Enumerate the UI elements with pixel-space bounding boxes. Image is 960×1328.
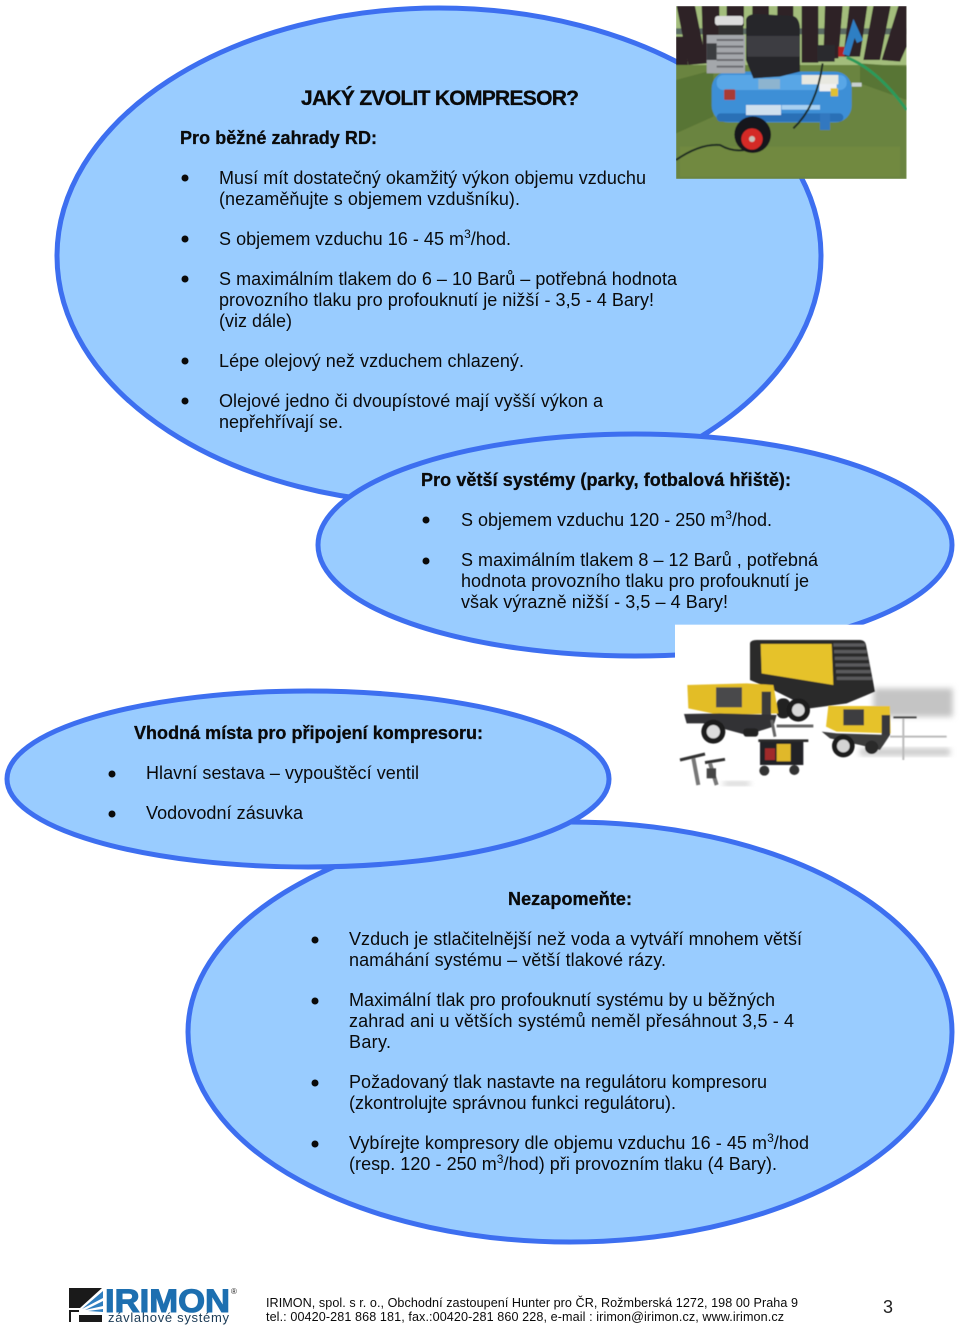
bullet list: larger systems [422, 508, 819, 612]
bubble: connection points [7, 691, 609, 867]
logo: IRIMON: závlahové systémy [108, 1310, 230, 1325]
bullet list: garden systems [182, 168, 678, 432]
bullet list: garden systems: (viz dále) [219, 311, 292, 331]
bubble: larger systems [318, 434, 952, 656]
bullet list: reminders: (zkontrolujte správnou funkci regulátoru). [349, 1093, 676, 1113]
bullet list: reminders: Vybírejte kompresory dle objemu vzduchu 16 - 45 m [349, 1133, 767, 1153]
bullet list: reminders: Vzduch je stlačitelnější než voda a vytváří mnohem větší [349, 929, 802, 949]
bubble: reminders [188, 822, 952, 1242]
bullet list: connection points: Vodovodní zásuvka [146, 803, 304, 823]
bullet list: larger systems: však výrazně nižší - 3,5 – 4 Bary! [461, 592, 728, 612]
bullet list: larger systems: S objemem vzduchu 120 - 250 m [461, 510, 725, 530]
panel: reminders [188, 822, 952, 1242]
bullet list: larger systems: 3 [725, 508, 732, 522]
bullet list: connection points: Hlavní sestava – vypouštěcí ventil [146, 763, 419, 783]
logo: IRIMON: ® [231, 1287, 237, 1296]
logo: IRIMON: IRIMON [105, 1283, 230, 1319]
panel: garden systems [57, 8, 821, 504]
heading: connection points: Vhodná místa pro připojení kompresoru: [134, 723, 483, 743]
bullet list: garden systems: S objemem vzduchu 16 - 45 m [219, 229, 464, 249]
bullet list: larger systems: /hod. [732, 510, 772, 530]
page number: 3 [883, 1297, 893, 1317]
footer: contact details: IRIMON, spol. s r. o., Obchodní zastoupení Hunter pro ČR, Rožmberská 1272, 198 00 Praha 9 [266, 1295, 798, 1310]
bullet list: larger systems: S maximálním tlakem 8 – 12 Barů , potřebná [461, 550, 819, 570]
bullet list: garden systems: (nezaměňujte s objemem vzdušníku). [219, 189, 520, 209]
bullet list: connection points [108, 763, 419, 823]
bullet list: reminders: zahrad ani u větších systémů neměl přesáhnout 3,5 - 4 [349, 1011, 794, 1031]
footer: contact details [266, 1295, 798, 1324]
logo: IRIMON [69, 1283, 237, 1325]
bullet list: garden systems: Olejové jedno či dvoupístové mají vyšší výkon a [219, 391, 604, 411]
bubble: garden systems [57, 8, 821, 504]
bullet list: reminders: namáhání systému – větší tlakové rázy. [349, 950, 666, 970]
panel: connection points [7, 691, 609, 867]
bullet list: garden systems: 3 [464, 227, 471, 241]
bullet list: reminders: /hod) při provozním tlaku (4 Bary). [504, 1154, 777, 1174]
bullet list: garden systems: S maximálním tlakem do 6 – 10 Barů – potřebná hodnota [219, 269, 678, 289]
heading: reminders: Nezapomeňte: [508, 889, 632, 909]
bullet list: reminders: Požadovaný tlak nastavte na regulátoru kompresoru [349, 1072, 767, 1092]
footer: contact details: tel.: 00420-281 868 181, fax.:00420-281 860 228, e-mail : irimon@irimon.cz, www.irimon.cz [266, 1310, 784, 1324]
bullet list: reminders [312, 929, 809, 1174]
bullet list: reminders: 3 [767, 1131, 774, 1145]
bullet list: reminders: Bary. [349, 1032, 391, 1052]
bullet list: larger systems: hodnota provozního tlaku pro profouknutí je [461, 571, 809, 591]
bullet list: reminders: 3 [497, 1152, 504, 1166]
bullet list: reminders: Maximální tlak pro profouknutí systému by u běžných [349, 990, 775, 1010]
photo: large compressors [675, 625, 958, 801]
bullet list: garden systems: nepřehřívají se. [219, 412, 343, 432]
bullet list: reminders: /hod [774, 1133, 809, 1153]
bullet list: garden systems: provozního tlaku pro profouknutí je nižší - 3,5 - 4 Bary! [219, 290, 654, 310]
heading: larger systems: Pro větší systémy (parky, fotbalová hřiště): [421, 470, 791, 490]
panel: larger systems [318, 434, 952, 656]
photo: garden compressor [676, 6, 907, 179]
heading: garden systems: Pro běžné zahrady RD: [180, 128, 377, 148]
bullet list: garden systems: Musí mít dostatečný okamžitý výkon objemu vzduchu [219, 168, 646, 188]
bullet list: reminders: (resp. 120 - 250 m [349, 1154, 497, 1174]
bullet list: garden systems: /hod. [471, 229, 511, 249]
bullet list: garden systems: Lépe olejový než vzduchem chlazený. [219, 351, 524, 371]
title: JAKÝ ZVOLIT KOMPRESOR? [301, 86, 579, 110]
